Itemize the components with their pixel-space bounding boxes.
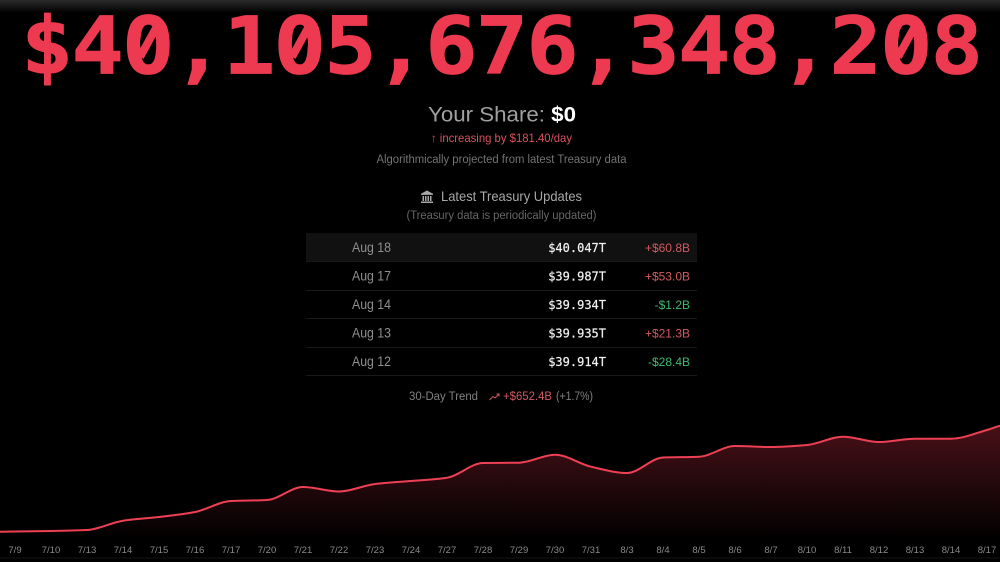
chart x-axis date labels: 7/14 <box>114 545 132 556</box>
30-day trend summary: +$652.4B <box>503 391 552 403</box>
chart x-axis date labels: 7/28 <box>474 545 492 556</box>
projection note: Algorithmically projected from latest Treasury data <box>376 154 627 166</box>
your share: Your Share: $0 <box>428 104 576 126</box>
chart x-axis date labels: 7/22 <box>330 545 348 556</box>
row: Aug 12: -$28.4B <box>648 355 690 369</box>
chart x-axis date labels: 7/29 <box>510 545 528 556</box>
table: latest treasury updates <box>306 233 697 376</box>
row: Aug 18: +$60.8B <box>645 241 690 255</box>
chart x-axis date labels: 8/7 <box>764 545 778 556</box>
chart x-axis date labels: 7/31 <box>582 545 600 556</box>
chart x-axis date labels: 8/4 <box>656 545 670 556</box>
row: Aug 18: Aug 18 <box>352 240 391 255</box>
icon: bank building <box>421 190 433 203</box>
row: Aug 13: Aug 13 <box>352 326 391 340</box>
chart x-axis date labels: 7/23 <box>366 545 384 556</box>
row: Aug 14: $39.934T <box>548 298 606 312</box>
chart x-axis date labels: 7/27 <box>438 545 456 556</box>
chart x-axis date labels: 8/14 <box>942 545 960 556</box>
chart x-axis date labels: 8/10 <box>798 545 816 556</box>
headline: debt counter: $40,105,676,348,208 <box>21 0 983 93</box>
row: Aug 12: $39.914T <box>548 355 606 369</box>
row: Aug 14: -$1.2B <box>655 298 690 312</box>
row: Aug 17: $39.987T <box>548 270 606 284</box>
row: Aug 13: $39.935T <box>548 326 606 340</box>
chart x-axis date labels: 7/24 <box>402 545 420 556</box>
chart x-axis date labels: 7/13 <box>78 545 96 556</box>
row: Aug 17: Aug 17 <box>352 268 391 284</box>
chart x-axis date labels: 8/17 <box>978 545 996 556</box>
row: Aug 18 <box>352 240 690 255</box>
row: Aug 18: $40.047T <box>548 241 606 255</box>
chart x-axis date labels: 7/10 <box>42 545 60 556</box>
chart x-axis date labels: 7/20 <box>258 545 276 556</box>
row: Aug 12: Aug 12 <box>352 354 391 369</box>
row: Aug 12 <box>352 354 690 369</box>
chart x-axis date labels: 8/5 <box>692 545 706 556</box>
row: Aug 17: +$53.0B <box>645 270 690 284</box>
row: Aug 13 <box>352 326 690 340</box>
chart x-axis date labels: 8/3 <box>620 545 634 556</box>
chart x-axis date labels: 8/6 <box>728 545 742 556</box>
chart x-axis date labels <box>8 545 996 556</box>
row: Aug 14 <box>352 297 690 312</box>
updates note: (Treasury data is periodically updated) <box>406 210 597 222</box>
chart x-axis date labels: 8/11 <box>834 545 852 556</box>
daily increase: ↑ increasing by $181.40/day <box>431 131 572 145</box>
area chart: 30-day debt trend <box>0 426 1000 540</box>
chart x-axis date labels: 7/9 <box>8 545 22 556</box>
row: Aug 17 <box>352 268 690 284</box>
row: Aug 14: Aug 14 <box>352 297 391 312</box>
row: Aug 13: +$21.3B <box>645 326 690 340</box>
chart x-axis date labels: 7/16 <box>186 545 204 556</box>
30-day trend summary <box>409 391 593 403</box>
chart x-axis date labels: 7/17 <box>222 545 240 556</box>
chart x-axis date labels: 7/15 <box>150 545 168 556</box>
30-day trend summary: (+1.7%) <box>556 391 593 403</box>
chart x-axis date labels: 8/13 <box>906 545 924 556</box>
chart x-axis date labels: 7/30 <box>546 545 564 556</box>
icon: trending up <box>490 394 499 400</box>
chart x-axis date labels: 7/21 <box>294 545 312 556</box>
updates heading: Latest Treasury Updates <box>441 188 582 204</box>
chart x-axis date labels: 8/12 <box>870 545 888 556</box>
30-day trend summary: 30-Day Trend <box>409 391 478 403</box>
